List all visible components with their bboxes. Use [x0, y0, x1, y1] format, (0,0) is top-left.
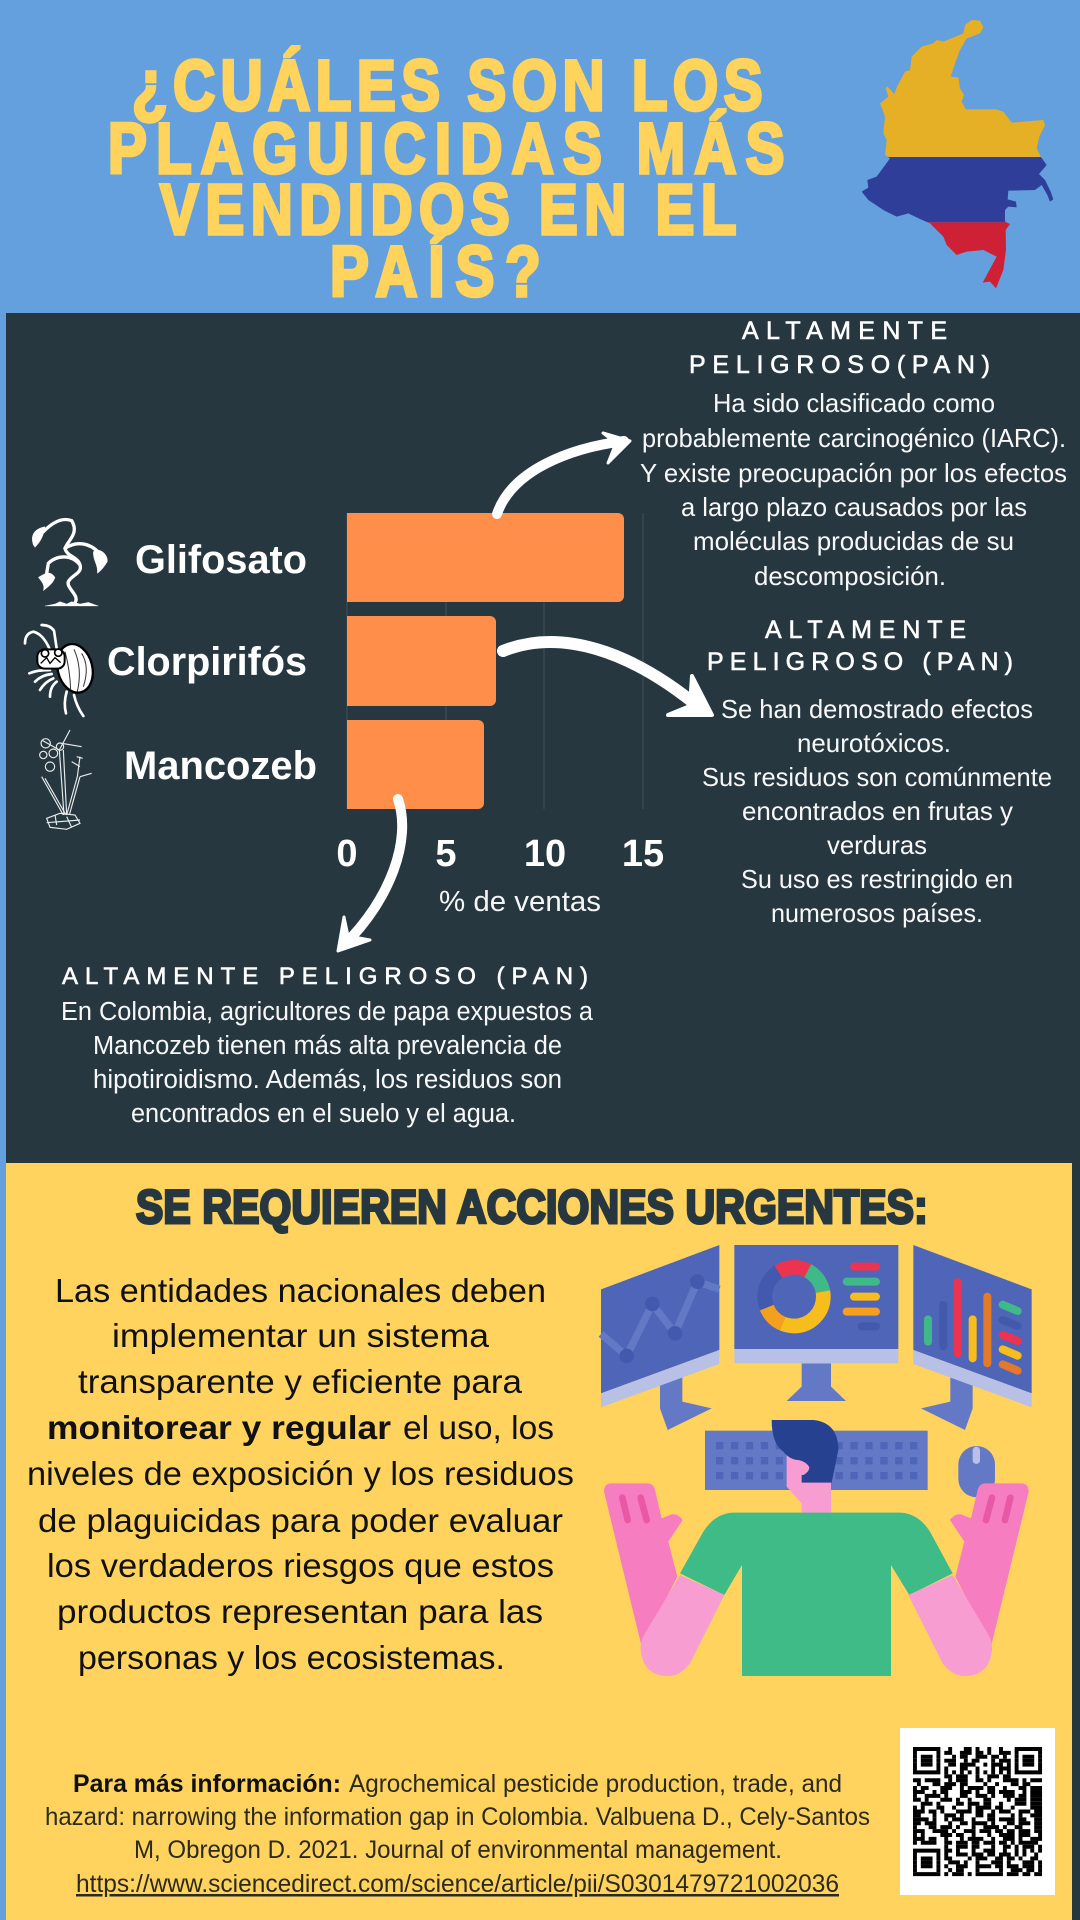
axis tick labels	[336, 833, 664, 875]
axis tick labels: 15	[622, 833, 664, 875]
heading: altamente peligroso: ALTAMENTE	[742, 317, 947, 345]
category labels: Clorpirifós	[107, 640, 307, 684]
text block: references	[45, 1770, 870, 1898]
text block: Clorpirifós hazard: neurotóxicos.	[797, 728, 951, 758]
text block: Mancozeb hazard: En Colombia, agricultores de papa expuestos a	[61, 998, 594, 1026]
left forearm and hand	[604, 1483, 683, 1647]
text block: Clorpirifós hazard: Se han demostrado efectos	[721, 694, 1033, 724]
panel: yellow urgent actions section	[6, 1163, 1072, 1920]
left monitor	[601, 1245, 719, 1430]
bar: Glifosato	[347, 513, 624, 602]
text block: Glifosato hazard: descomposición.	[754, 561, 946, 591]
text block: recommendations: transparente y eficiente para	[78, 1363, 523, 1400]
text block: Glifosato hazard	[640, 317, 1067, 591]
text block: Clorpirifós hazard: verduras	[827, 830, 927, 860]
heading: altamente peligroso: PELIGROSO(PAN)	[689, 351, 990, 379]
QR code	[900, 1728, 1055, 1895]
title: PAÍS?	[330, 231, 541, 311]
text block: references: M, Obregon D. 2021. Journal of environmental management.	[134, 1836, 782, 1864]
axis tick labels: 5	[435, 833, 457, 875]
text block: Glifosato hazard: Y existe preocupación por los efectos	[640, 458, 1067, 488]
icon: mancozeb crop plant	[40, 730, 92, 829]
shirt	[680, 1513, 953, 1676]
text block: Clorpirifós hazard	[702, 616, 1052, 928]
heading: altamente peligroso	[707, 616, 1013, 676]
heading: altamente peligroso: ALTAMENTE	[765, 616, 966, 644]
axis tick labels: 10	[524, 833, 566, 875]
text block: recommendations: de plaguicidas para poder evaluar	[38, 1502, 563, 1539]
heading: altamente peligroso	[689, 317, 990, 379]
arrow: Clorpirifós to hazard text	[503, 642, 712, 715]
text block: references: hazard: narrowing the information gap in Colombia. Valbuena D., Cely-Santos	[45, 1803, 870, 1831]
text block: references: Agrochemical pesticide production, trade, and	[349, 1770, 842, 1798]
text block: Clorpirifós hazard: encontrados en frutas y	[742, 796, 1013, 826]
category labels: Mancozeb	[124, 744, 317, 788]
head and neck	[787, 1450, 831, 1515]
text block: recommendations: monitorear y regular	[47, 1409, 391, 1446]
title: VENDIDOS EN EL	[160, 169, 736, 249]
arrow: Glifosato to hazard text	[497, 433, 630, 514]
title	[108, 45, 784, 311]
text block: recommendations: Las entidades nacionales deben	[55, 1272, 546, 1309]
right monitor with bar chart	[913, 1245, 1032, 1430]
icon: map of Colombia with flag colours	[857, 13, 1060, 292]
illustration: person at three monitors	[601, 1245, 1032, 1676]
text block: recommendations: el uso, los	[403, 1409, 554, 1446]
bar: Mancozeb	[347, 720, 484, 809]
icon: glyphosate plant	[32, 520, 107, 606]
bar chart: pesticide sales	[336, 513, 664, 918]
text block: references: Para más información:	[73, 1770, 341, 1798]
text block: recommendations: los verdaderos riesgos que estos	[47, 1547, 554, 1584]
arrow: Mancozeb to hazard text	[338, 799, 402, 951]
text block: Mancozeb hazard: encontrados en el suelo y el agua.	[131, 1100, 516, 1128]
right upper arm	[908, 1575, 992, 1676]
text block: Glifosato hazard: Ha sido clasificado como	[713, 388, 995, 418]
text block: recommendations: niveles de exposición y los residuos	[27, 1455, 574, 1492]
mouse	[958, 1446, 995, 1497]
left upper arm	[641, 1575, 724, 1676]
text block: Clorpirifós hazard: numerosos países.	[771, 898, 983, 928]
heading: urgent actions: SE REQUIEREN ACCIONES URGENTES:	[136, 1181, 928, 1234]
right forearm and hand	[950, 1483, 1029, 1647]
heading: altamente peligroso: PELIGROSO (PAN)	[707, 648, 1013, 676]
hair	[772, 1420, 838, 1483]
category labels	[107, 538, 317, 788]
text block: recommendations: implementar un sistema	[112, 1317, 490, 1354]
center monitor with donut chart	[734, 1245, 898, 1401]
title: PLAGUICIDAS MÁS	[108, 108, 784, 188]
title: ¿CUÁLES SON LOS	[132, 45, 763, 125]
heading: altamente peligroso: ALTAMENTE PELIGROSO (PAN)	[62, 963, 588, 990]
icon: beetle	[25, 625, 98, 716]
bar: Clorpirifós	[347, 616, 496, 706]
text block: recommendations: productos representan para las	[57, 1593, 543, 1630]
text block: Glifosato hazard: moléculas producidas de su	[693, 526, 1014, 556]
text block: references: https://www.sciencedirect.com/science/article/pii/S0301479721002036	[76, 1870, 839, 1898]
text block: Clorpirifós hazard: Su uso es restringido en	[741, 864, 1013, 894]
category labels: Glifosato	[135, 538, 307, 582]
text block: Mancozeb hazard: Mancozeb tienen más alta prevalencia de	[93, 1032, 562, 1060]
keyboard	[705, 1431, 928, 1490]
text block: Mancozeb hazard	[61, 963, 594, 1128]
text block: recommendations	[27, 1272, 574, 1676]
text block: Mancozeb hazard: hipotiroidismo. Además, los residuos son	[93, 1066, 562, 1094]
text block: Glifosato hazard: a largo plazo causados por las	[681, 492, 1027, 522]
text block: Glifosato hazard: probablemente carcinogénico (IARC).	[642, 423, 1066, 453]
axis title: % de ventas	[439, 886, 601, 918]
text block: Clorpirifós hazard: Sus residuos son comúnmente	[702, 762, 1052, 792]
text block: recommendations: personas y los ecosistemas.	[78, 1639, 505, 1676]
axis tick labels: 0	[336, 833, 358, 875]
